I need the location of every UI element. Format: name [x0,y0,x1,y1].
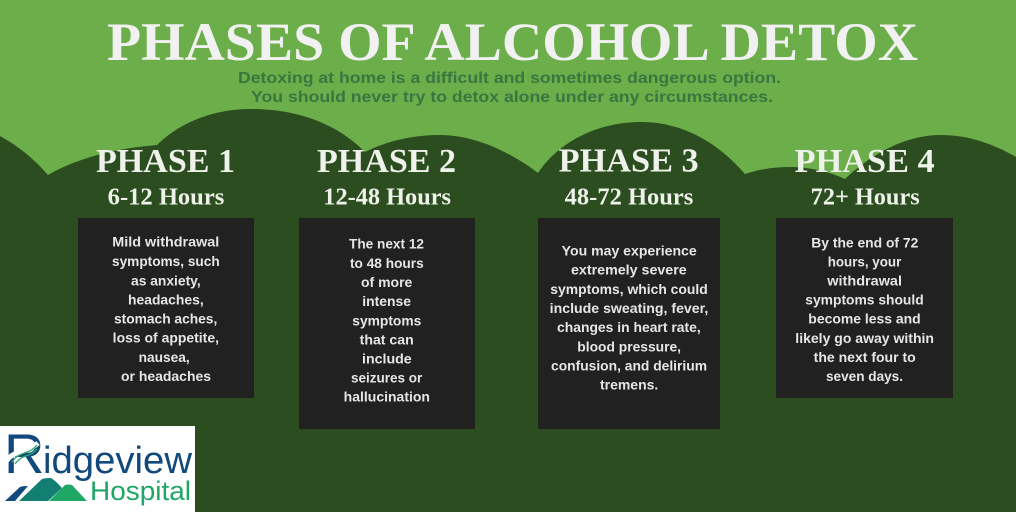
card text: include sweating, fever, [550,301,708,316]
card text: symptoms [352,313,421,328]
heading: phase 3: PHASE 3 [559,142,699,180]
card background [78,218,254,398]
card text [344,236,430,404]
card text: nausea, [139,350,190,365]
card text: include [362,351,412,366]
panel: phase 2 [299,143,475,429]
card text: that can [360,332,414,347]
icon: logo swoosh accent [12,445,37,464]
card text: intense [362,294,411,309]
card text: tremens. [600,377,658,392]
card text: stomach aches, [114,312,217,327]
card text [112,235,220,384]
heading: phase 4: PHASE 4 [795,143,935,180]
card text: By the end of 72 [811,235,918,250]
card background [538,218,720,429]
heading: phase 2: PHASE 2 [317,143,456,180]
card text [550,244,708,392]
heading: phase 1: PHASE 1 [96,143,235,180]
card text: symptoms, such [112,254,220,269]
card text: Mild withdrawal [112,235,219,250]
card text: likely go away within [795,331,934,346]
icon: logo swoosh [3,443,38,467]
subheading: 6-12 hours: 6-12 Hours [108,184,224,210]
card text: loss of appetite, [113,331,219,346]
panel: phase 1 [78,143,254,398]
card text: headaches, [128,293,204,308]
card text: to 48 hours [350,256,424,271]
card text: You may experience [562,244,697,259]
subtitle: You should never try to detox alone under any circumstances. [251,89,773,106]
card text: seizures or [351,370,423,385]
card text: The next 12 [349,236,424,251]
card text: as anxiety, [131,273,201,288]
title: PHASES OF ALCOHOL DETOX [107,12,918,72]
subtitle: Detoxing at home is a difficult and sometimes dangerous option. [238,70,781,87]
logo wordmark: Ridgeview: R [4,422,44,485]
card background [299,218,475,429]
card text: withdrawal [826,274,902,289]
subtitle [238,70,781,106]
logo background [0,426,195,512]
card text: or headaches [121,369,211,384]
card background [776,218,953,398]
subheading: 48-72 hours: 48-72 Hours [565,184,693,210]
card text: blood pressure, [577,339,681,354]
card text: extremely severe [571,263,687,278]
panel: phase 3 [538,142,720,429]
card text: hours, your [828,254,902,269]
logo: Ridgeview Hospital [0,422,195,512]
subheading: 12-48 hours: 12-48 Hours [323,184,451,210]
card text: hallucination [344,389,430,404]
card text: become less and [808,312,921,327]
panel: phase 4 [776,143,953,398]
background: dark green hills [0,109,1016,512]
card text: the next four to [814,350,916,365]
card text: seven days. [826,369,903,384]
card text: confusion, and delirium [551,358,707,373]
card text: of more [361,275,412,290]
subheading: 72+ hours: 72+ Hours [811,184,920,210]
icon: logo mountains [5,478,87,501]
logo wordmark: Hospital: Hospital [90,476,191,506]
card text: changes in heart rate, [557,320,701,335]
card text: symptoms, which could [550,282,708,297]
card text: symptoms should [805,293,924,308]
logo wordmark: Ridgeview: idgeview [43,440,193,482]
card text [795,235,934,384]
